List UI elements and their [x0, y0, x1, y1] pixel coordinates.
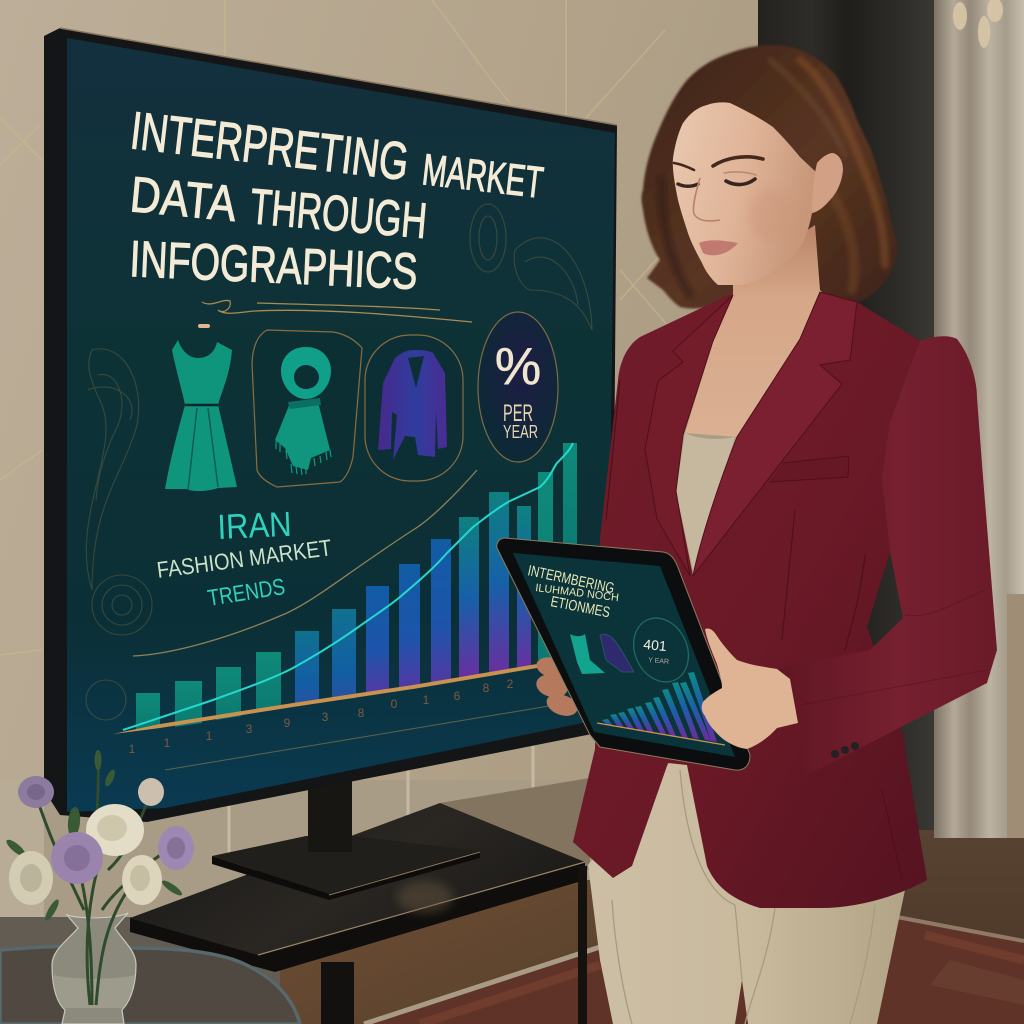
- title: THROUGH: [248, 178, 429, 249]
- tablet: [497, 538, 750, 770]
- panel: percent per year: [478, 312, 558, 462]
- subtitle: Iran Fashion Market Trends: TRENDS: [206, 573, 287, 611]
- tablet dress icon: [570, 634, 605, 674]
- title: [128, 101, 546, 300]
- lower gold line: [165, 700, 585, 770]
- glass side table: [0, 946, 300, 1024]
- axis labels: 0: [391, 697, 398, 711]
- axis labels: 1: [129, 742, 136, 756]
- monitor display: [67, 38, 615, 812]
- monitor top highlight: [60, 28, 617, 125]
- leaves: [4, 750, 184, 922]
- chandelier crystals: [953, 0, 1003, 48]
- title: MARKET: [420, 145, 546, 208]
- axis labels: 1: [423, 693, 430, 707]
- light curtain: [934, 0, 1024, 838]
- axis labels: [129, 677, 514, 756]
- left lapel: [645, 295, 733, 576]
- pants: [588, 700, 905, 1024]
- dark curtain: [758, 0, 936, 830]
- tablet stat bubble: Y EAR: [648, 657, 669, 666]
- axis labels: 2: [507, 677, 514, 691]
- axis labels: 8: [358, 706, 365, 720]
- beige wall panel behind curtain: [1007, 594, 1024, 838]
- tablet body: [497, 538, 750, 770]
- icon: scarf: [275, 347, 331, 475]
- right lapel: [693, 292, 857, 576]
- icon: jacket: [378, 350, 447, 460]
- blazer seams: [606, 380, 902, 880]
- cheek shading: [748, 189, 792, 241]
- nose: [693, 178, 720, 221]
- tablet stat bubble: [623, 609, 699, 691]
- panel: percent per year: PER: [503, 400, 533, 427]
- subtitle: Iran Fashion Market Trends: IRAN: [217, 505, 292, 547]
- sleeve cuff buttons: [831, 742, 859, 758]
- blazer body: [573, 293, 927, 908]
- vase: [52, 913, 136, 1024]
- tablet bars: [602, 672, 717, 742]
- console table: [130, 803, 587, 1024]
- right sleeve: [777, 336, 997, 775]
- blooms: [9, 776, 194, 905]
- tablet title: INTERMBERING: [526, 562, 616, 597]
- eyes: [678, 172, 756, 186]
- title: INTERPRETING: [128, 101, 412, 192]
- lips: [699, 240, 738, 255]
- tablet title: ILUHMAD NOCH: [535, 582, 620, 604]
- axis labels: 6: [454, 689, 461, 703]
- sleeve crease: [800, 590, 987, 705]
- tablet title: ETIONMES: [549, 593, 611, 621]
- axis labels: 1: [206, 729, 213, 743]
- gold trend curve: [133, 470, 477, 656]
- panel: scarf: [252, 330, 362, 487]
- title: INFOGRAPHICS: [129, 230, 419, 300]
- woman: [497, 45, 997, 1024]
- neck and chest: [685, 225, 832, 437]
- flowers in vase: [0, 750, 300, 1024]
- chart axis: [113, 658, 580, 734]
- wall monitor: [44, 28, 617, 822]
- tablet title: [526, 562, 620, 621]
- subtitle: Iran Fashion Market Trends: FASHION MARKET: [155, 534, 333, 583]
- subtitle: Iran Fashion Market Trends: [155, 505, 333, 611]
- breast pocket: [770, 456, 849, 482]
- hair back: [642, 45, 897, 308]
- tablet axis: [597, 723, 725, 745]
- icon: dress: [165, 324, 237, 491]
- axis labels: 9: [284, 716, 291, 730]
- panel: jacket: [365, 335, 463, 481]
- right hand: [702, 628, 798, 749]
- rug: [364, 917, 1024, 1024]
- tv stand neck: [308, 780, 352, 852]
- title: DATA: [128, 166, 239, 232]
- left fingers behind tablet: [534, 654, 580, 720]
- axis labels: 3: [246, 722, 253, 736]
- tablet stat bubble: 401: [643, 636, 668, 654]
- title underline flourish: [202, 300, 472, 322]
- axis labels: 1: [164, 736, 171, 750]
- decorative paisley ornaments: [86, 204, 592, 720]
- axis labels: 8: [483, 681, 490, 695]
- bar chart: [136, 443, 577, 731]
- panel: percent per year: %: [495, 338, 541, 396]
- stems: [36, 753, 172, 1005]
- hair highlights: [662, 60, 885, 295]
- monitor bezel: [44, 28, 617, 822]
- face: [673, 102, 817, 285]
- axis labels: 3: [322, 710, 329, 724]
- tv stand base: [212, 836, 480, 900]
- ear: [812, 153, 843, 213]
- tablet jacket icon: [600, 634, 634, 672]
- camisole top: [676, 433, 735, 571]
- eyebrows: [674, 157, 763, 170]
- cyan trend line: [123, 443, 573, 730]
- panel: percent per year: YEAR: [503, 422, 538, 442]
- vase water: [54, 975, 135, 1008]
- tablet screen: [513, 553, 735, 757]
